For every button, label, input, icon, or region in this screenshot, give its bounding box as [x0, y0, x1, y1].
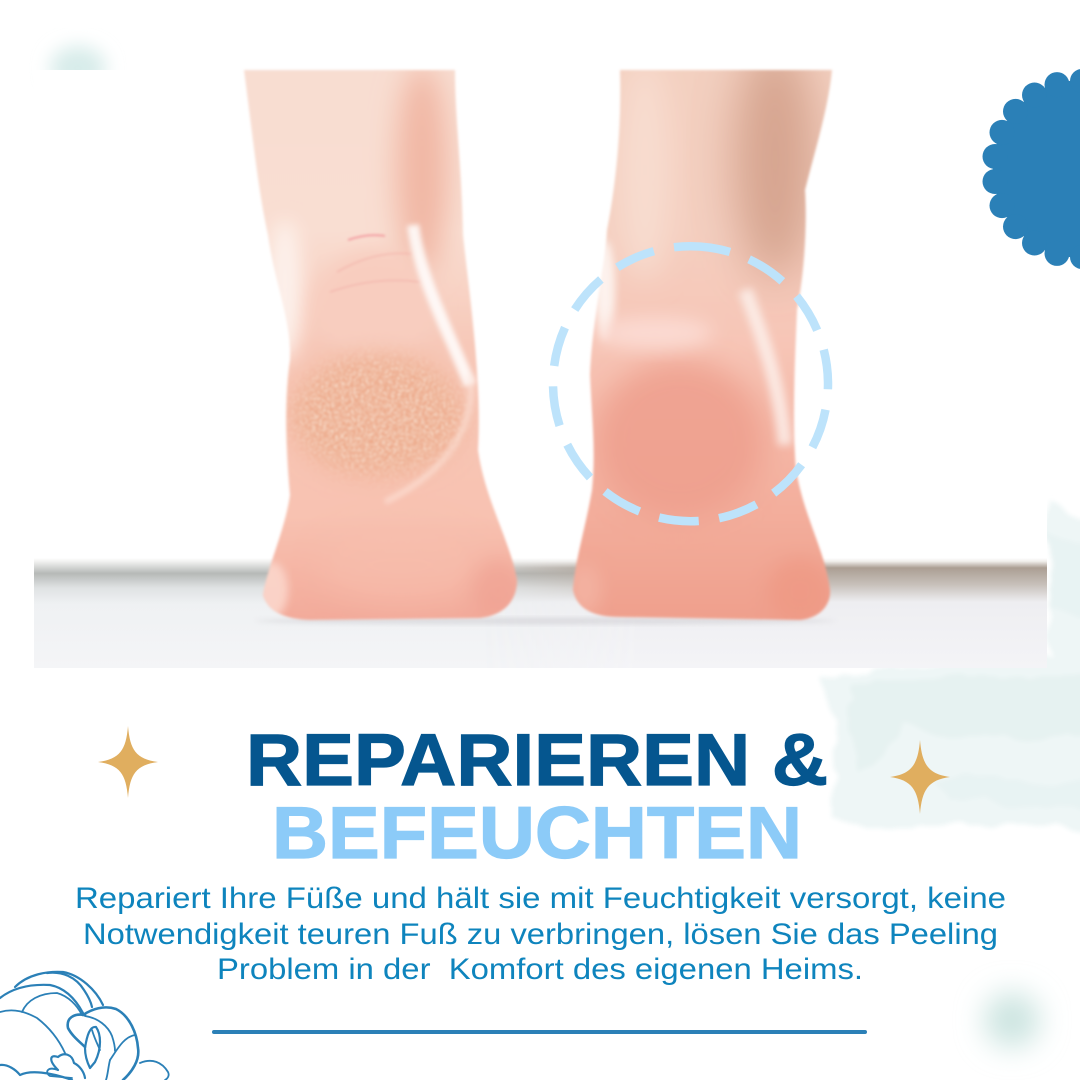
- scalloped blue badge: [982, 69, 1080, 269]
- body text: Problem in der Komfort des eigenen Heims.: [217, 953, 863, 986]
- cracked heel patch: [291, 355, 463, 475]
- highlight on left ankle: [413, 225, 470, 385]
- flower line art: [0, 972, 169, 1080]
- body text: [75, 882, 1006, 986]
- dashed highlight circle: [553, 246, 828, 521]
- title: REPARIEREN &: [246, 720, 828, 801]
- divider line: [212, 1030, 867, 1034]
- body text: Notwendigkeit teuren Fuß zu verbringen, lösen Sie das Peeling: [83, 918, 998, 951]
- floor: [34, 558, 1047, 668]
- foot shadow: [255, 618, 835, 624]
- body text: Repariert Ihre Füße und hält sie mit Feuchtigkeit versorgt, keine: [75, 882, 1006, 915]
- title: [246, 720, 828, 874]
- highlight on right ankle: [745, 290, 785, 445]
- right foot with smooth heel: [572, 68, 833, 622]
- left foot with cracked heel: [243, 68, 518, 622]
- icon: left gold sparkle: [98, 726, 158, 798]
- title: BEFEUCHTEN: [272, 793, 802, 874]
- icon: right gold sparkle: [890, 740, 950, 814]
- panel: foot photo: [34, 40, 1047, 668]
